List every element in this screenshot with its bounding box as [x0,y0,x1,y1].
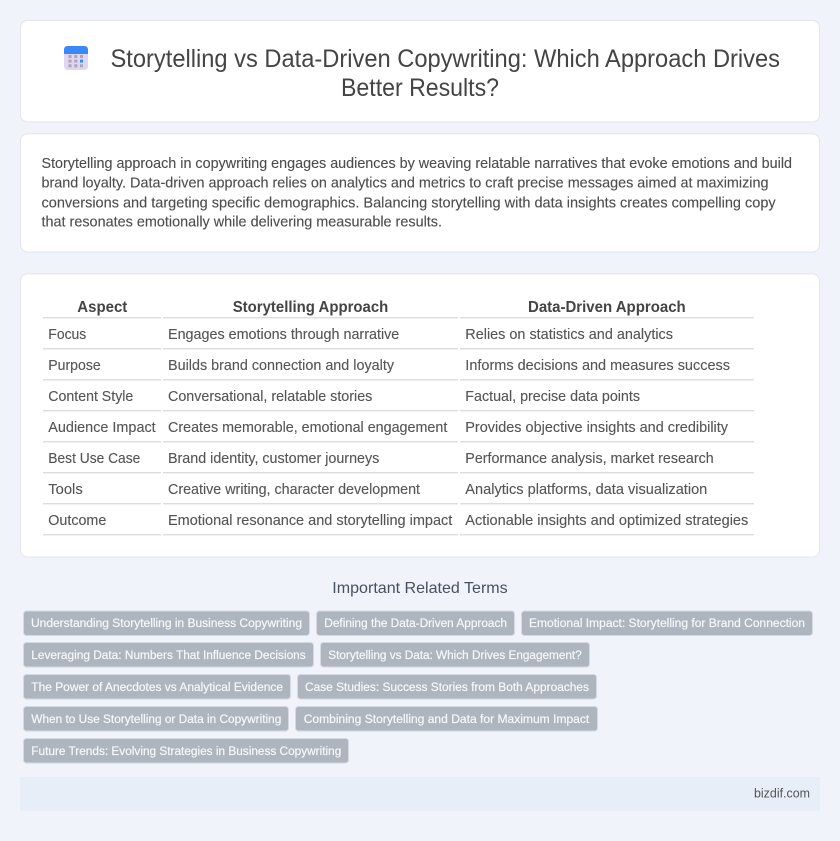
tag: Understanding Storytelling in Business Copywriting [31,616,302,630]
tag [24,674,290,699]
tag: Emotional Impact: Storytelling for Brand Connection [529,616,805,630]
row: purpose: Informs decisions and measures success [465,358,730,374]
summary text block: brand loyalty. Data-driven approach relies on analytics and metrics to craft precise messages aimed at maximizing [42,176,768,192]
row: audience impact: Provides objective insights and credibility [465,420,729,436]
title: Storytelling vs Data-Driven Copywriting: Which Approach Drives [110,45,780,73]
table header row [43,299,754,318]
icon: calendar [64,46,88,70]
tag [296,706,598,731]
summary text block: that resonates emotionally while delivering measurable results. [42,214,442,230]
panel: header [20,20,820,122]
row: outcome: Actionable insights and optimized strategies [465,513,748,529]
row: content style: Conversational, relatable stories [168,389,372,405]
row: purpose [43,358,754,380]
tag: The Power of Anecdotes vs Analytical Evidence [31,680,283,694]
row: purpose: Builds brand connection and loyalty [168,358,395,374]
row: focus [43,327,754,349]
tag: Case Studies: Success Stories from Both Approaches [305,680,589,694]
heading: important related terms: Important Related Terms [332,580,508,597]
row: audience impact [43,420,754,442]
panel: comparison table [20,274,820,557]
tag [522,611,812,636]
row: audience impact: Audience Impact [48,420,156,436]
table header row: Storytelling Approach [233,299,388,316]
tag [24,642,314,667]
tag: Combining Storytelling and Data for Maximum Impact [304,712,590,726]
tag: Defining the Data-Driven Approach [324,616,507,630]
tag: When to Use Storytelling or Data in Copywriting [31,712,281,726]
row: best use case: Performance analysis, market research [465,451,714,467]
row: outcome: Outcome [48,513,106,529]
summary text block: Storytelling approach in copywriting engages audiences by weaving relatable narratives that evoke emotions and build [42,156,792,172]
tag: Leveraging Data: Numbers That Influence Decisions [31,648,306,662]
row: focus: Relies on statistics and analytics [465,327,673,343]
footer [20,777,820,811]
row: tools: Analytics platforms, data visualization [465,482,707,498]
footer: bizdif.com [754,786,810,800]
tag [320,642,590,667]
row: best use case: Best Use Case [48,451,140,467]
panel: summary [20,134,820,252]
tag [24,738,348,763]
row: content style: Content Style [48,389,133,405]
tag [24,706,288,731]
row: purpose: Purpose [48,358,101,374]
panel: related term tags [24,611,812,763]
table header row: Data-Driven Approach [528,299,686,316]
tag [24,611,310,636]
row: best use case [43,451,754,473]
row: outcome [43,513,754,535]
row: outcome: Emotional resonance and storytelling impact [168,513,452,529]
title [110,45,780,102]
tag [316,611,514,636]
summary text block: conversions and targeting specific demographics. Balancing storytelling with data insights creates compelling copy [42,196,776,212]
row: content style [43,389,754,411]
row: focus: Engages emotions through narrative [168,327,399,343]
tag: Future Trends: Evolving Strategies in Business Copywriting [31,744,341,758]
row: focus: Focus [48,327,86,343]
row: tools: Creative writing, character development [168,482,420,498]
summary text block [42,156,792,230]
row: tools [43,482,754,504]
row: best use case: Brand identity, customer journeys [168,451,379,467]
title: Better Results? [341,74,499,102]
tag [298,674,596,699]
row: tools: Tools [48,482,83,498]
row: audience impact: Creates memorable, emotional engagement [168,420,447,436]
table header row: Aspect [77,299,127,316]
row: content style: Factual, precise data points [465,389,640,405]
tag: Storytelling vs Data: Which Drives Engagement? [328,648,582,662]
